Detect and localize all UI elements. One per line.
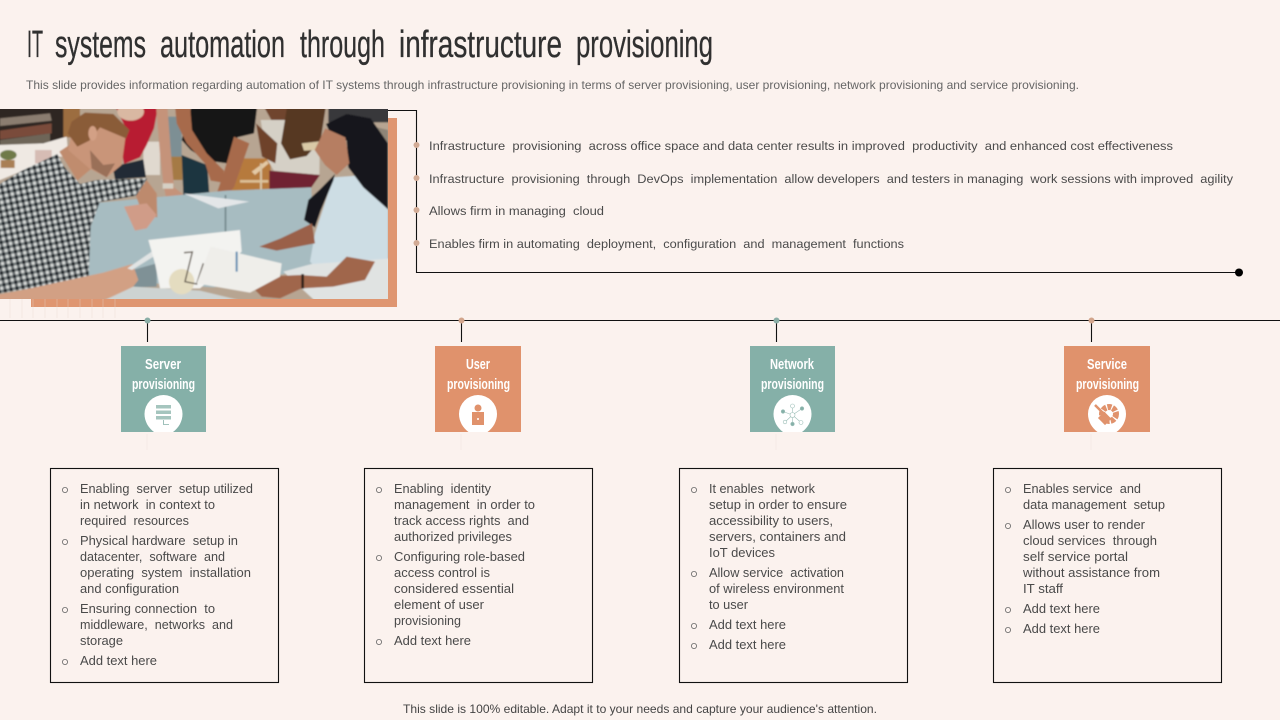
panel: server provisioning details: storage xyxy=(80,634,123,648)
sofa xyxy=(88,187,314,287)
panel: network provisioning details: to user xyxy=(709,598,748,612)
title: systems xyxy=(55,24,146,66)
person with curly hair xyxy=(264,109,288,120)
panel: network provisioning header xyxy=(750,346,835,432)
panel: network provisioning details: servers, containers and xyxy=(709,530,846,544)
panel: network provisioning details: Add text here xyxy=(709,618,786,632)
panel: service provisioning details: IT staff xyxy=(1023,582,1064,596)
panel: user provisioning details: Enabling identity xyxy=(394,482,492,496)
panel: network provisioning details: It enables network xyxy=(709,482,816,496)
panel: network provisioning details: setup in order to ensure xyxy=(709,498,847,512)
panel: service provisioning details: cloud services through xyxy=(1023,534,1157,548)
title: automation xyxy=(160,24,285,66)
panel: server provisioning details: datacenter, software and xyxy=(80,550,225,564)
panel: server provisioning details: in network in context to xyxy=(80,498,215,512)
background shelf and textiles xyxy=(0,106,65,145)
panel: service provisioning header xyxy=(1064,346,1150,432)
title: IT xyxy=(27,24,43,66)
panel: network provisioning details: accessibility to users, xyxy=(709,514,833,528)
panel: user provisioning details: management in order to xyxy=(394,498,535,512)
panel: server provisioning header: provisioning xyxy=(132,376,195,393)
panel: service provisioning details: without assistance from xyxy=(1022,566,1160,580)
panel: server provisioning details: required resources xyxy=(80,514,189,528)
panel: server provisioning details: Ensuring connection to xyxy=(80,602,215,616)
footer note: This slide is 100% editable. Adapt it to your needs and capture your audience's attention. xyxy=(403,702,877,716)
faint grid under photo xyxy=(10,299,115,318)
panel: service provisioning details: data management setup xyxy=(1023,498,1165,512)
panel: user provisioning details: Add text here xyxy=(394,634,471,648)
red shirt person xyxy=(115,106,158,164)
faint stems below headers xyxy=(147,434,1091,450)
panel: server provisioning details: Physical hardware setup in xyxy=(80,534,238,548)
panel: server provisioning details: and configuration xyxy=(80,582,179,596)
icon: server rack xyxy=(144,395,182,432)
connector bracket with end dot xyxy=(388,110,1243,276)
panel: network provisioning header: provisioning xyxy=(761,376,824,393)
panel: service provisioning details: Add text here xyxy=(1023,602,1100,616)
panel: server provisioning header xyxy=(121,346,206,432)
panel: user provisioning details: provisioning xyxy=(394,614,461,628)
key points list xyxy=(414,139,1234,251)
panel: service provisioning details xyxy=(994,468,1222,682)
panel: network provisioning details: Allow service activation xyxy=(709,566,844,580)
panel: service provisioning details: Enables service and xyxy=(1023,482,1141,496)
panel: user provisioning details: authorized privileges xyxy=(394,530,512,544)
bullet 1: Infrastructure provisioning across office space and data center results in improved productivity and enhanced cost effectiveness xyxy=(429,139,1173,153)
panel: service provisioning header: provisioning xyxy=(1076,376,1139,393)
panel: user provisioning details: access control is xyxy=(394,566,490,580)
panel: user provisioning details: Configuring role-based xyxy=(394,550,525,564)
panel: network provisioning details: IoT devices xyxy=(709,546,775,560)
panel: server provisioning header: Server xyxy=(145,356,181,373)
bullet 4: Enables firm in automating deployment, configuration and management functions xyxy=(429,237,904,251)
right woman xyxy=(310,175,388,272)
icon: user at laptop xyxy=(459,395,497,432)
panel: server provisioning details: middleware, networks and xyxy=(80,618,233,632)
person in black xyxy=(182,106,257,163)
panel: user provisioning header: User xyxy=(466,356,490,373)
panel: user provisioning details xyxy=(364,468,592,682)
title: infrastructure xyxy=(399,24,562,66)
panel: server provisioning details: Add text here xyxy=(80,654,157,668)
panel: network provisioning details: of wireless environment xyxy=(709,582,845,596)
panel: server provisioning details: operating system installation xyxy=(80,566,251,580)
panel: service provisioning details: Allows user to render xyxy=(1023,518,1145,532)
panel: user provisioning header: provisioning xyxy=(447,376,510,393)
man in checked shirt xyxy=(0,154,147,294)
title: provisioning xyxy=(576,24,713,66)
timeline xyxy=(0,318,1280,342)
panel: service provisioning header: Service xyxy=(1087,356,1127,373)
bullet 2: Infrastructure provisioning through DevOps implementation allow developers and testers in managing work sessions with improved agility xyxy=(429,172,1234,186)
panel: network provisioning details: Add text here xyxy=(709,638,786,652)
title xyxy=(27,24,713,66)
panel: network provisioning details xyxy=(680,468,908,682)
photo: team reviewing documents on a sofa xyxy=(0,103,392,302)
panel: server provisioning details xyxy=(50,468,278,682)
panel: server provisioning details: Enabling server setup utilized xyxy=(80,482,253,496)
panel: user provisioning details: element of user xyxy=(394,598,484,612)
title: through xyxy=(300,24,385,66)
panel: user provisioning header xyxy=(435,346,521,432)
panel: user provisioning details: track access rights and xyxy=(394,514,529,528)
icon: network nodes xyxy=(774,395,812,432)
panel: user provisioning details: considered essential xyxy=(394,582,514,596)
orange block behind photo xyxy=(31,118,397,307)
subtitle text: This slide provides information regarding automation of IT systems through infrastructure provisioning in terms of server provisioning, user provisioning, network provisioning and service provisioning. xyxy=(26,78,1079,92)
panel: service provisioning details: self service portal xyxy=(1023,550,1128,564)
panel: service provisioning details: Add text here xyxy=(1023,622,1100,636)
pillow, cup and documents xyxy=(148,230,242,288)
icon: gear and wrench xyxy=(1088,395,1126,432)
panel: network provisioning header: Network xyxy=(770,356,814,373)
bullet 3: Allows firm in managing cloud xyxy=(429,204,604,218)
